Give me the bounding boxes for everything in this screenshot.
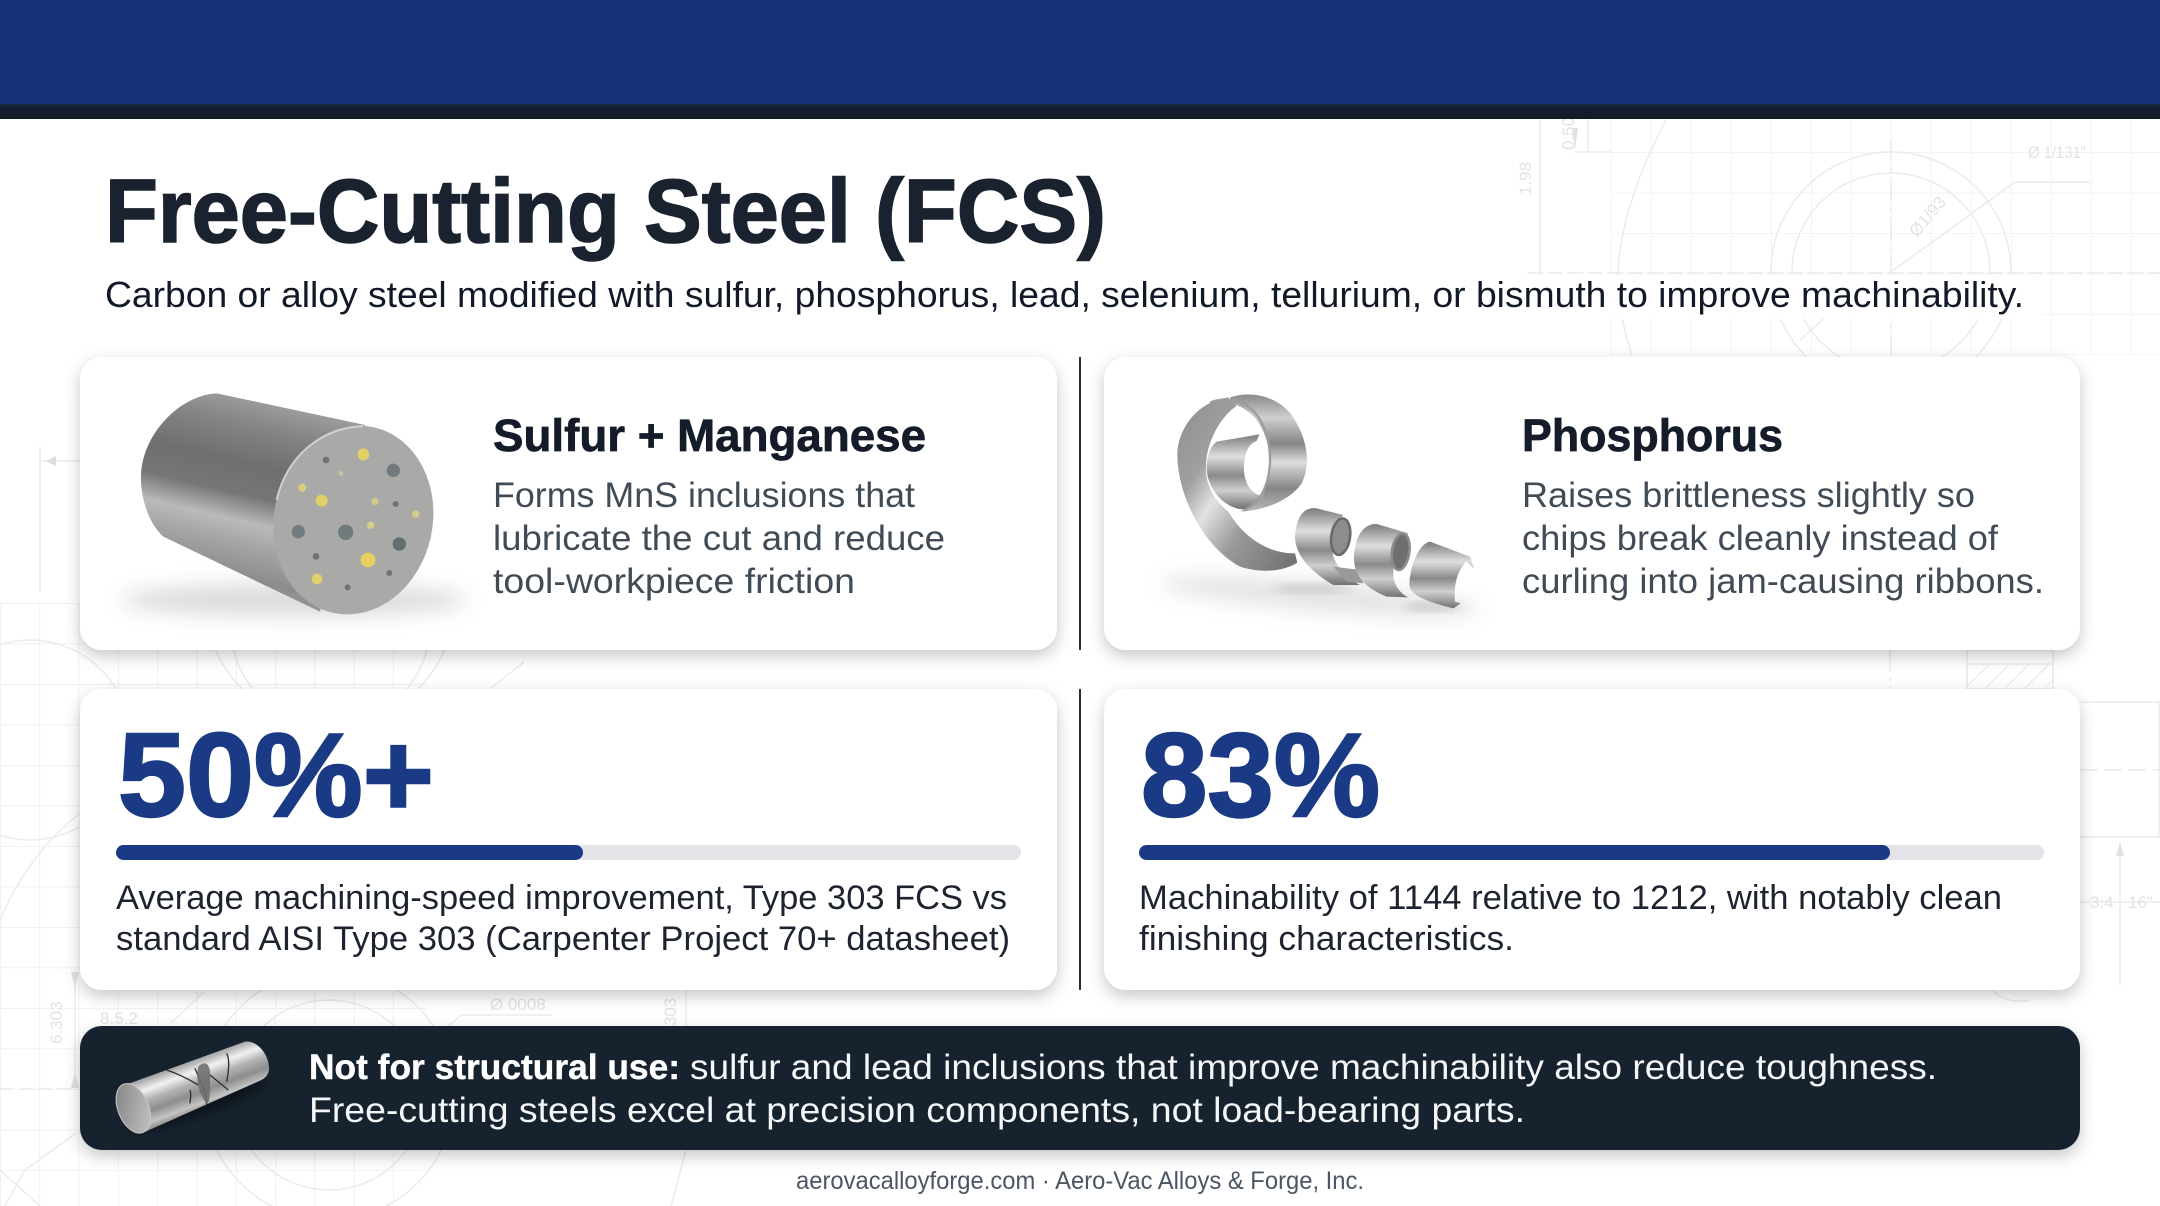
panel: sulfur + manganese xyxy=(80,357,1057,650)
background: blueprint dimensions: 8.5.2 xyxy=(100,1009,138,1028)
stat number: 50%+: 50%+ xyxy=(118,709,434,842)
background: blueprint dimensions: 303 xyxy=(661,998,680,1026)
divider: bottom row xyxy=(1079,689,1081,990)
subtitle: Carbon or alloy steel modified with sulfur, phosphorus, lead, selenium, tellurium, or bismuth to improve machinability. xyxy=(105,274,2024,315)
background: blueprint dimensions: Ø 0008 xyxy=(490,995,546,1014)
background: blueprint dimensions xyxy=(47,117,2153,1044)
text: 50%+ description: standard AISI Type 303 (Carpenter Project 70+ datasheet) xyxy=(116,920,1010,958)
text: sulfur description: lubricate the cut and reduce xyxy=(493,519,945,558)
panel: phosphorus xyxy=(1104,357,2080,650)
text: 83% description: Machinability of 1144 relative to 1212, with notably clean xyxy=(1139,879,2002,917)
text: 83% description: finishing characteristics. xyxy=(1139,920,1514,958)
background: blueprint dimensions: 6.303 xyxy=(47,1001,66,1044)
progress bar: 83% xyxy=(1139,845,2044,860)
text: 83% description xyxy=(1139,879,2002,958)
text: warning line 1: Not for structural use: xyxy=(309,1048,680,1087)
text: sulfur description: tool-workpiece friction xyxy=(493,562,855,601)
text: 50%+ description xyxy=(116,879,1010,958)
icon: metal chips curl xyxy=(1159,395,1481,624)
text: phosphorus description: curling into jam-causing ribbons. xyxy=(1522,562,2044,601)
text: warning line 1: sulfur and lead inclusions that improve machinability also reduce toughness. xyxy=(690,1048,1937,1087)
panel: 83% stat xyxy=(1104,689,2080,990)
text: sulfur description: Forms MnS inclusions that xyxy=(493,476,915,515)
text: warning line 2: Free-cutting steels excel at precision components, not load-bearing parts. xyxy=(309,1091,1525,1130)
heading: sulfur + manganese: Sulfur + Manganese xyxy=(493,410,926,461)
heading: phosphorus: Phosphorus xyxy=(1522,410,1783,461)
text: phosphorus description xyxy=(1522,476,2044,601)
icon: steel bar cross-section with inclusions xyxy=(120,393,467,629)
progress bar: 50%+ xyxy=(116,845,1021,860)
background: blueprint dimensions: 0.50 xyxy=(1559,117,1578,150)
text: 50%+ description: Average machining-speed improvement, Type 303 FCS vs xyxy=(116,879,1007,917)
background: blueprint dimensions: 3:4 xyxy=(2090,893,2114,912)
text: phosphorus description: Raises brittleness slightly so xyxy=(1522,476,1975,515)
stat number: 83%: 83% xyxy=(1141,709,1380,842)
text: phosphorus description: chips break cleanly instead of xyxy=(1522,519,1998,558)
callout: not for structural use xyxy=(80,1026,2080,1150)
icon: cracked steel rod xyxy=(109,1042,269,1138)
divider: top row xyxy=(1079,357,1081,650)
title: Free-Cutting Steel (FCS) xyxy=(105,162,1106,262)
background: blueprint dimensions: 1.98 xyxy=(1516,162,1535,195)
text: sulfur description xyxy=(493,476,945,601)
top banner xyxy=(0,0,2160,119)
footer credit: aerovacalloyforge.com · Aero-Vac Alloys & Forge, Inc. xyxy=(796,1167,1364,1195)
panel: 50%+ stat xyxy=(80,689,1057,990)
background: blueprint dimensions: Ø1/93 xyxy=(1906,193,1950,241)
background: blueprint dimensions: 16" xyxy=(2128,893,2153,912)
background: blueprint dimensions: Ø 1/131" xyxy=(2028,143,2086,162)
